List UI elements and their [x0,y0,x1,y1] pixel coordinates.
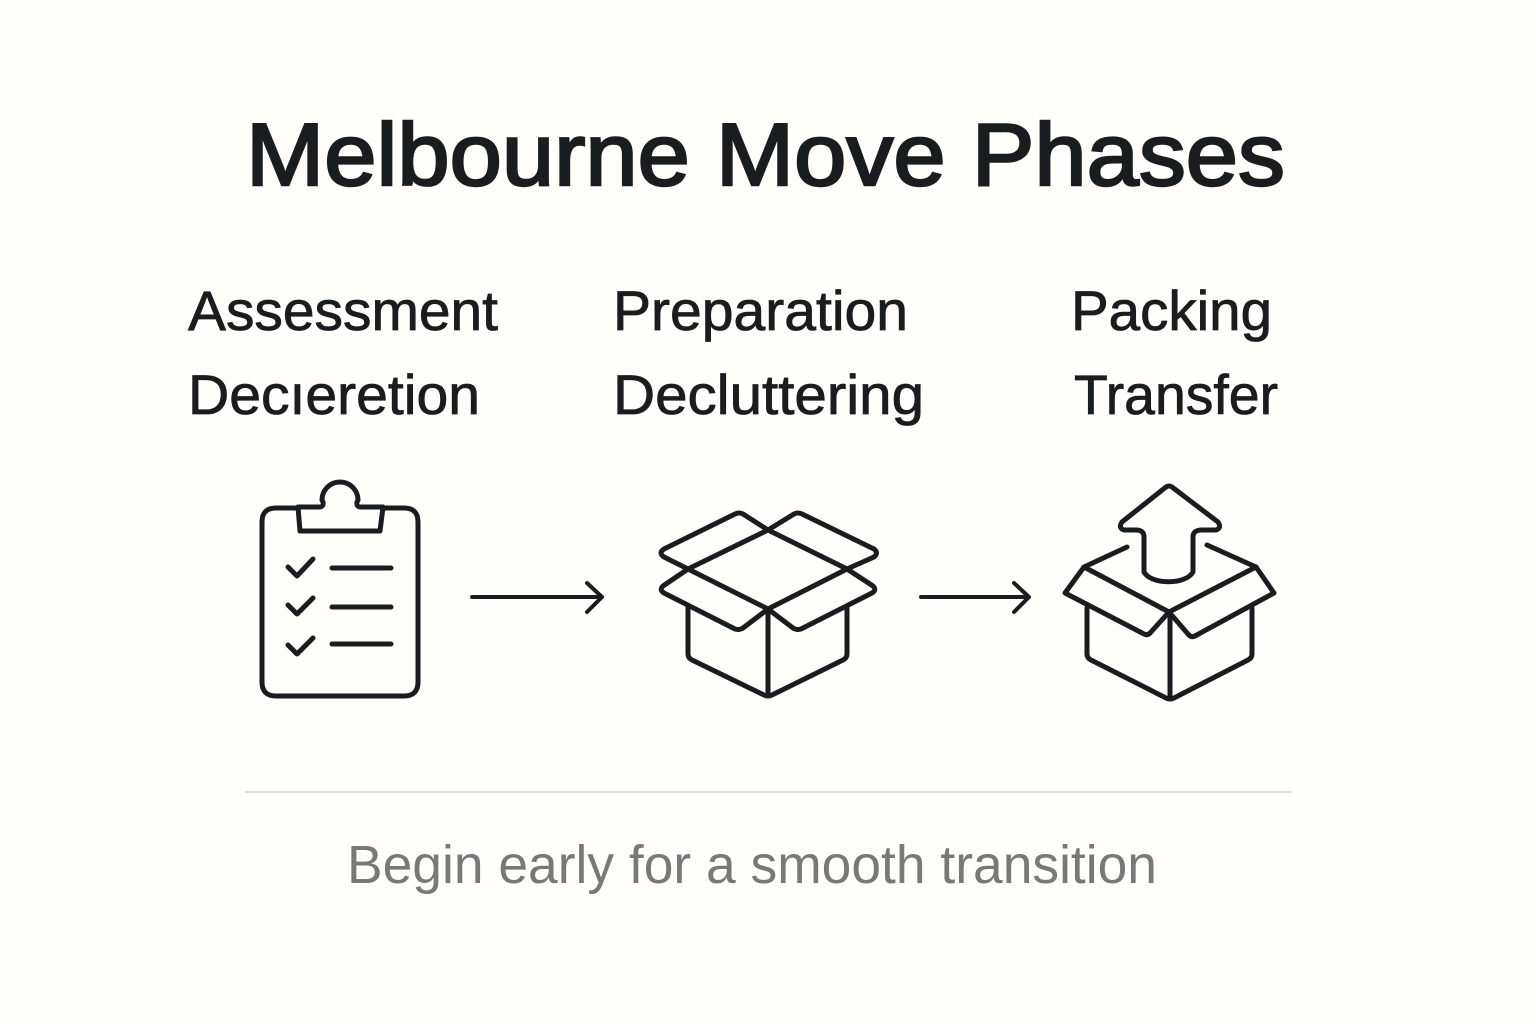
phase label: Preparation: Preparation [613,279,908,342]
arrow: preparation to packing [921,583,1029,612]
icon: clipboard checklist [262,482,418,696]
icon: box with up arrow [1065,486,1274,699]
phase label: Decluttering: Decluttering [613,363,924,426]
tagline: Begin early for a smooth transition [347,835,1157,895]
phase label: Packing: Packing [1071,279,1272,342]
phase label: Assessment: Assessment [188,279,498,342]
arrow: assessment to preparation [472,583,602,612]
title: Melbourne Move Phases [246,105,1285,204]
icon: open box [661,513,876,696]
phase label: Decıeretion: Decıeretion [188,363,480,426]
divider [245,791,1292,793]
phase label: Transfer: Transfer [1074,363,1278,426]
